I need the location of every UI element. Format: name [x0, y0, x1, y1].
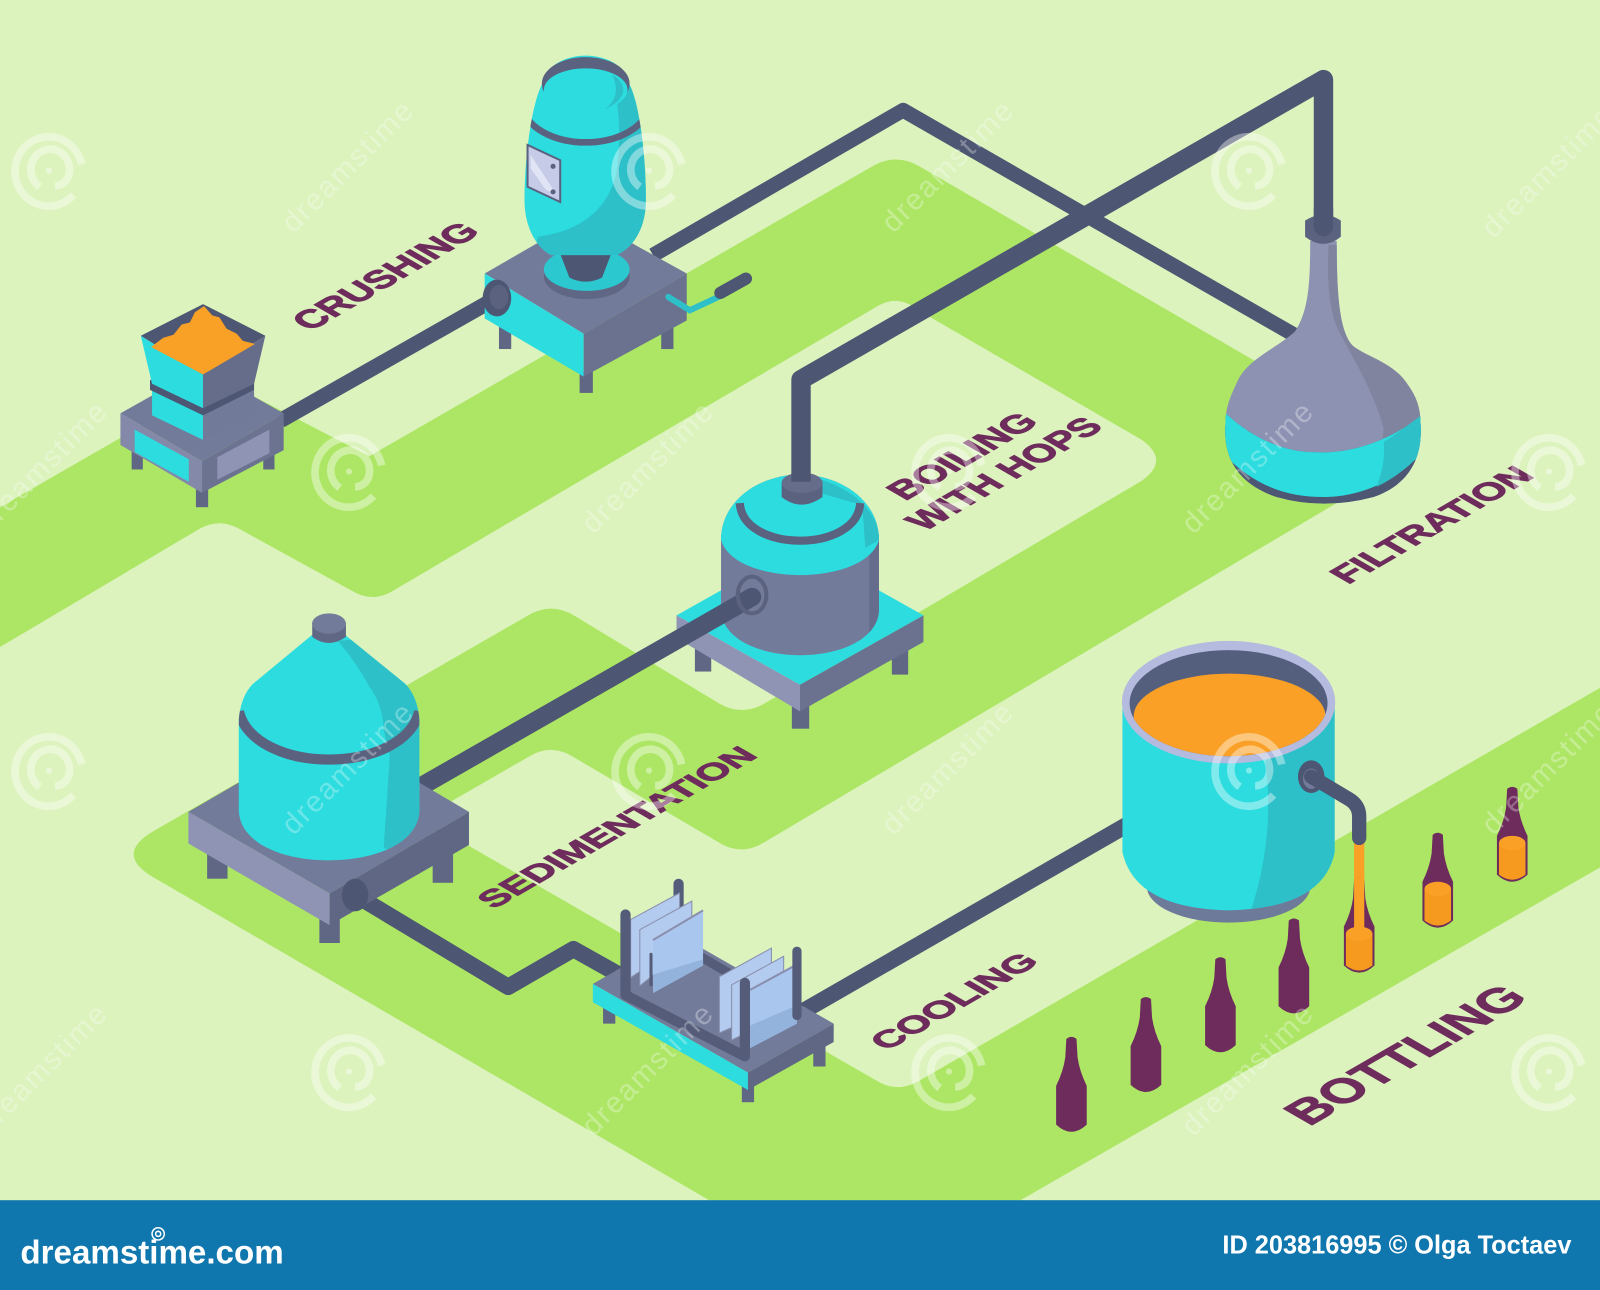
pipe: sedimentation to cooling — [352, 893, 624, 987]
label: sedimentation: SEDIMENTATION — [468, 741, 765, 913]
cooling platform — [593, 935, 834, 1090]
crusher base box — [120, 367, 284, 493]
pipe stub into flask collar — [1314, 209, 1333, 227]
kettle legs — [695, 643, 908, 729]
machine: fermenter pot — [1122, 641, 1364, 929]
footer logo text: dreamstime.com — [20, 1234, 284, 1271]
watermark text: dreamstime — [875, 94, 1020, 239]
watermark text: dreamstime — [875, 697, 1020, 841]
right plates — [719, 948, 797, 1048]
empty bottles — [1056, 919, 1309, 1132]
cooling legs — [603, 998, 826, 1102]
watermark text: dreamstime — [575, 396, 720, 540]
crusher hopper with malt — [141, 304, 265, 408]
barrel body — [524, 56, 646, 256]
label: cooling: COOLING — [861, 947, 1047, 1055]
pipe: kettle to flask — [801, 80, 1323, 482]
flask body — [1219, 241, 1429, 510]
filled bottle two — [1422, 833, 1453, 928]
machine: filtration flask — [1219, 215, 1429, 510]
machine: cooling rack — [593, 884, 834, 1102]
flask collar — [1305, 215, 1341, 244]
watermark text: dreamstime — [275, 697, 420, 841]
machine: boiling kettle — [677, 473, 923, 729]
label: bottling: BOTTLING — [1273, 978, 1540, 1132]
machine: crusher — [120, 304, 284, 507]
pipe: sedimentation tank to kettle — [418, 597, 752, 788]
label: filtration: FILTRATION — [1322, 462, 1542, 589]
barrel neck — [544, 248, 630, 299]
left plates — [631, 893, 703, 993]
filled bottle three — [1497, 787, 1528, 882]
pot spout — [1298, 760, 1364, 929]
mill crank handle — [668, 279, 746, 310]
footer bar — [0, 1200, 1600, 1290]
mill legs — [499, 327, 673, 393]
mill base box — [485, 216, 687, 377]
watermark text: dreamstime — [575, 998, 720, 1142]
cooling back post and rail — [679, 884, 797, 1012]
watermark spirals — [15, 137, 1582, 1107]
label: boiling: BOILING — [877, 407, 1047, 505]
pipe: barrel to flask — [653, 110, 1301, 339]
tank base — [188, 730, 469, 925]
kettle base — [677, 546, 923, 711]
footer logo spiral — [152, 1228, 164, 1240]
tank outlet ring — [342, 879, 368, 911]
pipe: crusher to barrel — [281, 296, 500, 420]
watermark text: dreamstime — [1175, 998, 1320, 1142]
kettle cylinder — [721, 475, 882, 655]
kettle top collar — [782, 473, 822, 505]
machine: barrel mill — [483, 56, 746, 393]
pot body — [1122, 702, 1342, 913]
kettle outlet ring — [738, 577, 766, 613]
tank body and cone — [239, 633, 429, 860]
label: with hops: WITH HOPS — [897, 412, 1112, 536]
label: crushing: CRUSHING — [282, 217, 489, 336]
footer credit: ID 203816995 © Olga Toctaev — [1222, 1231, 1572, 1259]
mill inlet ring — [483, 280, 511, 316]
pot rim and orange liquid — [1122, 641, 1335, 763]
pipe: cooling to fermenter — [801, 825, 1128, 1012]
watermark text: dreamstime — [1175, 396, 1320, 540]
filled bottle under spout — [1344, 878, 1374, 973]
tank top cap — [312, 613, 346, 643]
cooling front posts and rail — [626, 914, 797, 1056]
crusher throat — [150, 380, 254, 440]
crusher legs — [132, 449, 274, 507]
watermark text: dreamstime — [275, 94, 420, 239]
tank legs — [207, 847, 453, 943]
pot foot — [1147, 851, 1310, 923]
machine: sedimentation tank — [188, 613, 469, 943]
